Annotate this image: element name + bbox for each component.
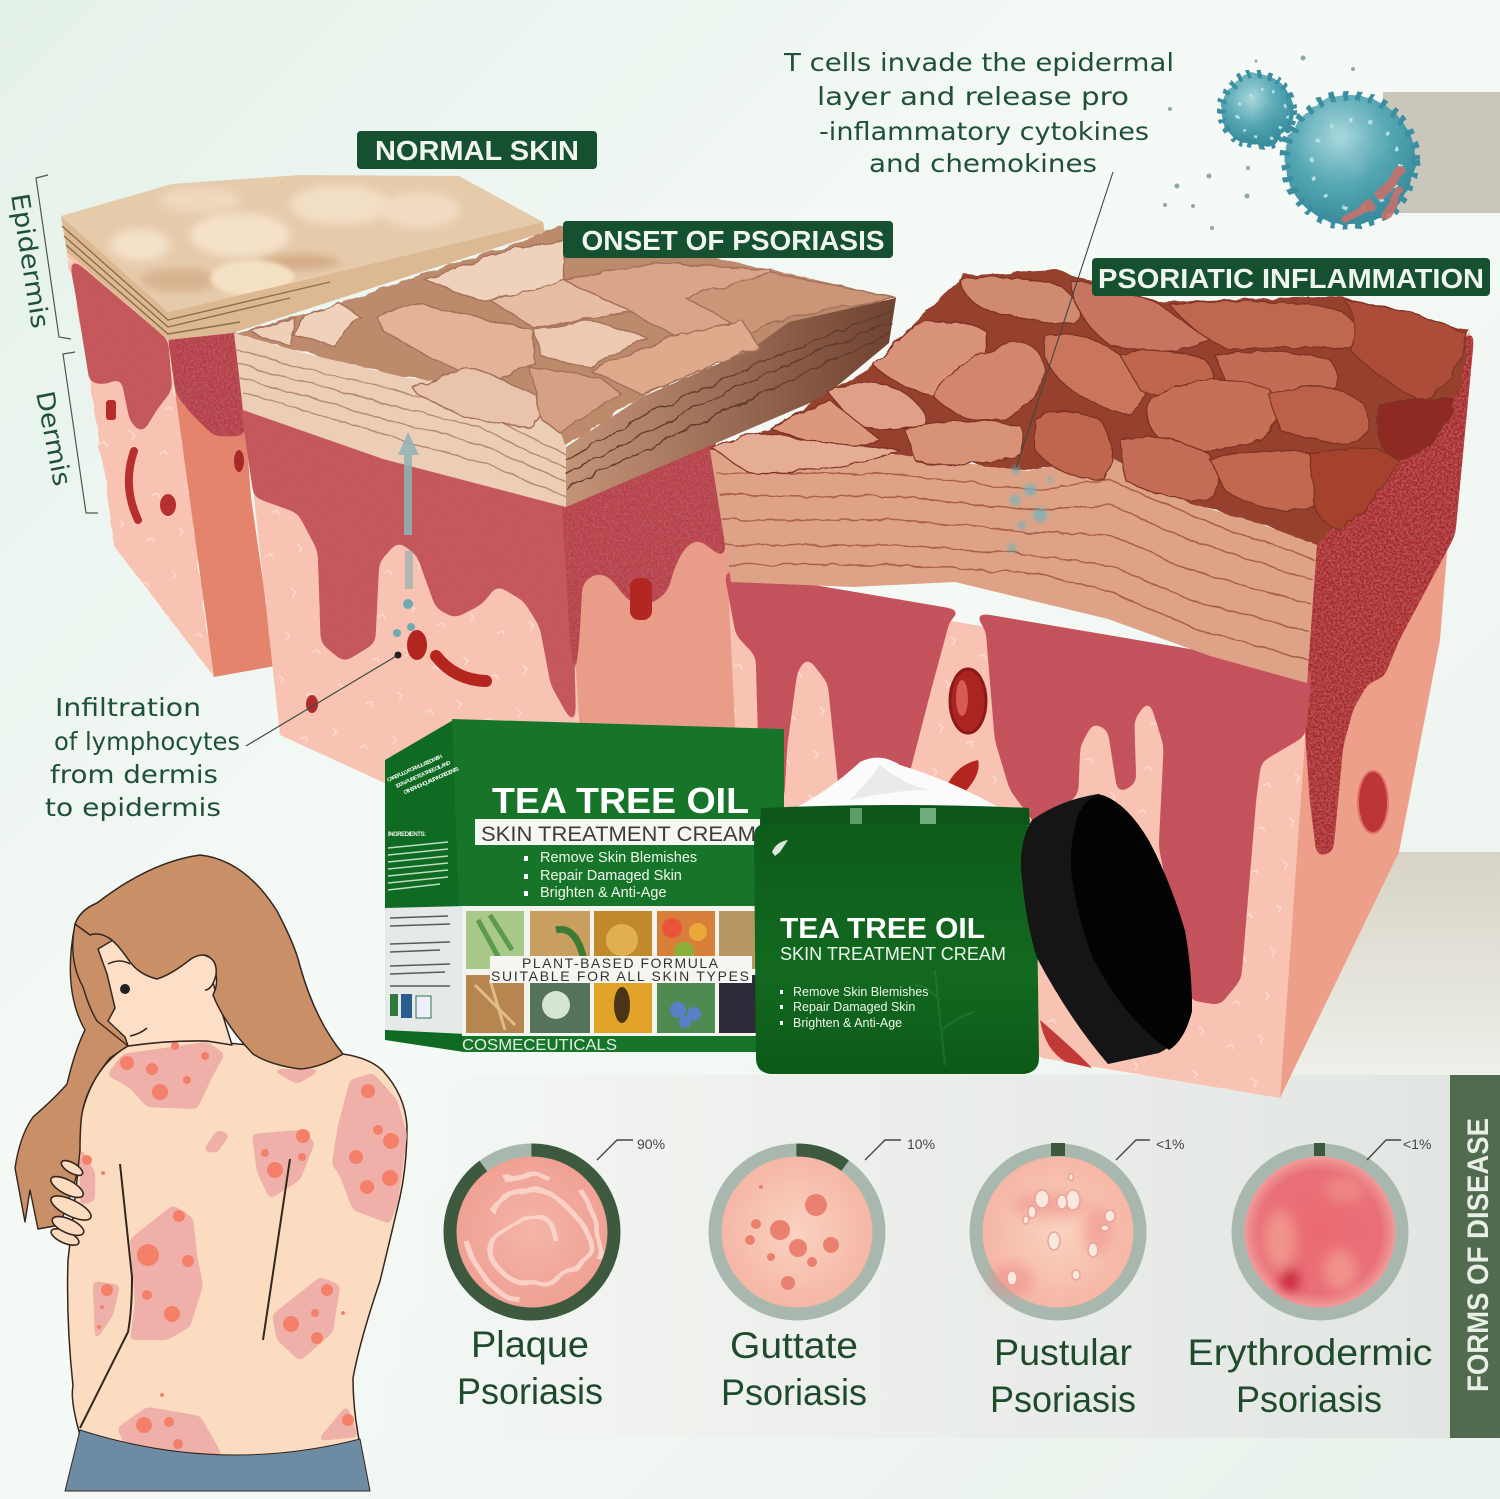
jar subtitle: SKIN TREATMENT CREAM [780, 944, 1006, 964]
label: epidermis bracket [5, 175, 71, 339]
normal skin dermis red band [69, 256, 172, 434]
skin block: normal skin [61, 175, 545, 677]
guttate leader [865, 1140, 901, 1160]
vessel 3 [160, 494, 176, 516]
pustular share mark [1051, 1143, 1065, 1156]
jar highlight [772, 840, 788, 856]
psoriasis spots [82, 1042, 399, 1449]
erythrodermic percent: <1% [1403, 1136, 1431, 1152]
jar bullets: Remove Skin Blemishes [793, 985, 928, 999]
product: jar [754, 758, 1039, 1074]
heading: onset of psoriasis: ONSET OF PSORIASIS [582, 225, 884, 256]
box left ingredients text: INGREDIENTS: [388, 832, 426, 838]
floating particles [1163, 56, 1355, 230]
jar bullets: Repair Damaged Skin [793, 1000, 915, 1014]
eyebrow and mouth [108, 961, 147, 1036]
hair top [75, 855, 343, 1069]
T cells text: T cells invade the epidermal [783, 48, 1174, 77]
heading: psoriatic inflammation: PSORIATIC INFLAMMATION [1098, 263, 1484, 294]
inflamed vessel right [1358, 771, 1388, 833]
back and torso [68, 1041, 407, 1460]
box left ingredient lines [388, 842, 448, 890]
plant-based text: SUITABLE FOR ALL SKIN TYPES [491, 968, 749, 984]
cosmeceuticals: COSMECEUTICALS [462, 1037, 617, 1054]
onset red dermis with fingers [240, 400, 576, 730]
plant-based band [490, 956, 752, 983]
onset vessel right [630, 578, 652, 620]
hair fill beside face [71, 924, 135, 1046]
bottom panel background [380, 1075, 1452, 1438]
disease form: guttate psoriasis [715, 1136, 935, 1413]
neck and face [98, 930, 232, 1046]
pustular label: Psoriasis [990, 1379, 1136, 1420]
jar title: TEA TREE OIL [780, 913, 985, 945]
inflamed layers left [710, 450, 1317, 683]
guttate percent: 10% [907, 1136, 935, 1152]
ear [203, 955, 216, 990]
inflamed left red dermis [724, 570, 1312, 1005]
infiltration text: of lymphocytes [54, 727, 240, 756]
onset left dermis face [245, 411, 582, 790]
jar bullets: Brighten & Anti-Age [793, 1016, 902, 1030]
box bullets: Brighten & Anti-Age [540, 885, 667, 901]
side banner: forms of disease [1450, 1075, 1500, 1438]
plaque label: Plaque [471, 1324, 589, 1365]
inflamed vessel left [950, 669, 986, 733]
box left panel top text: OTHER HIGH-QUALITY INGREDIENTS. [403, 766, 461, 796]
certification badges [390, 994, 431, 1018]
label: dermis bracket [30, 352, 98, 513]
psoriasis patches [80, 1042, 407, 1456]
beige backdrop band behind skin block [1280, 852, 1500, 1077]
pustular leader [1116, 1140, 1150, 1160]
infiltration text: Infiltration [55, 693, 201, 722]
normal skin top face [61, 175, 543, 312]
guttate spots [745, 1185, 839, 1290]
jar body [754, 824, 1039, 1074]
onset migration arrow [398, 432, 419, 535]
T cell large [1285, 95, 1415, 225]
T cells text: layer and release pro [817, 82, 1129, 111]
plaque ring [450, 1150, 614, 1314]
erythrodermic leader [1367, 1140, 1401, 1160]
inflamed fingers lower [1040, 1020, 1092, 1068]
box subtitle: SKIN TREATMENT CREAM [481, 823, 756, 846]
inflamed right face [1280, 331, 1470, 1098]
T cell cluster in epidermis [1008, 466, 1053, 552]
label: epidermis bracket: Epidermis [5, 191, 55, 330]
callout: infiltration of lymphocytes [45, 652, 402, 822]
heading: normal skin [357, 131, 597, 169]
box left description lines [390, 916, 450, 986]
box left panel [385, 719, 464, 1052]
guttate label: Guttate [730, 1325, 858, 1366]
inflamed scale base [710, 270, 1470, 545]
guttate share arc [715, 1150, 879, 1314]
box white image area [462, 906, 762, 1036]
vessel 2 [129, 451, 138, 520]
guttate label: Psoriasis [721, 1372, 867, 1413]
onset vessel [407, 630, 427, 660]
normal skin layers [61, 216, 545, 340]
box left panel top text: 100% PURE TEA TREE OIL AND [395, 760, 452, 790]
eye [120, 984, 130, 994]
box title: TEA TREE OIL [492, 780, 749, 821]
onset right layers [566, 298, 896, 507]
product: tea tree oil box [385, 719, 784, 1054]
cream [795, 758, 1000, 808]
plaque leader [597, 1140, 633, 1160]
inflamed left pink face [728, 582, 1307, 1098]
onset vessel small [306, 695, 318, 713]
skin block: psoriatic inflammation [710, 270, 1475, 1098]
box left panel top text: CAREFULLY FORMULATED WITH [386, 754, 444, 784]
vessel 4 [234, 450, 244, 472]
product: jar lid [1021, 794, 1192, 1064]
box left panel white section [385, 906, 466, 1034]
hand [48, 1158, 94, 1249]
normal skin right face [168, 333, 275, 677]
plaque label: Psoriasis [457, 1371, 603, 1412]
box front [452, 719, 784, 1052]
jar botanical [915, 970, 975, 1065]
side banner: forms of disease: FORMS OF DISEASE [1462, 1118, 1495, 1392]
inflamed vessel inner [956, 680, 968, 716]
icon: T cell viruses [1163, 56, 1415, 230]
box subtitle band [475, 819, 760, 845]
plaque share arc [450, 1150, 614, 1314]
T cell small [1221, 74, 1293, 146]
onset scales [250, 240, 896, 433]
plant-based text: PLANT-BASED FORMULA [522, 955, 719, 971]
inflamed right red dermis [1302, 325, 1475, 857]
box bullets: Remove Skin Blemishes [540, 850, 697, 866]
back lines [80, 1159, 290, 1428]
cream fold [850, 765, 930, 800]
inflamed scales [712, 277, 1468, 530]
illustration: woman with psoriasis [15, 855, 407, 1491]
T cells text: -inflammatory cytokines [819, 117, 1149, 146]
inflamed vessel mid [945, 760, 979, 795]
long hair behind arm [15, 924, 128, 1229]
erythrodermic share mark [1314, 1143, 1325, 1156]
disease form: erythrodermic psoriasis [1188, 1136, 1432, 1420]
heading: normal skin: NORMAL SKIN [375, 135, 579, 166]
pustular redness [990, 1193, 1112, 1296]
T cells leader line [1016, 172, 1113, 468]
jar bullet marks [780, 990, 783, 1025]
plaque percent: 90% [637, 1136, 665, 1152]
ingredient tiles [466, 911, 759, 1033]
jar rim [760, 805, 1030, 825]
erythrodermic label: Erythrodermic [1188, 1332, 1432, 1373]
normal skin dermis left face [67, 252, 214, 677]
callout: T cells [783, 48, 1174, 468]
erythrodermic label: Psoriasis [1236, 1379, 1382, 1420]
infiltration text: from dermis [50, 760, 218, 789]
skin block: onset of psoriasis [234, 226, 896, 790]
infiltration leader line [246, 655, 398, 746]
box bullets: Repair Damaged Skin [540, 868, 682, 884]
disease form: plaque psoriasis [450, 1136, 665, 1412]
pustules [1007, 1174, 1115, 1285]
jar rim highlights [850, 808, 936, 824]
T cells text: and chemokines [869, 149, 1097, 178]
normal skin red finger [168, 328, 245, 436]
erythrodermic ring [1238, 1150, 1402, 1314]
pustular label: Pustular [994, 1332, 1132, 1373]
onset right red finger band [562, 435, 726, 725]
onset vessel curve [436, 656, 486, 681]
vessel 1 [106, 400, 116, 420]
pustular ring [976, 1150, 1140, 1314]
label: dermis bracket: Dermis [30, 389, 77, 488]
guttate ring [715, 1150, 879, 1314]
disease form: pustular psoriasis [976, 1136, 1184, 1420]
erythrodermic texture [1264, 1178, 1365, 1292]
box bullet marks [524, 856, 528, 896]
jeans [65, 1430, 370, 1491]
pustular percent: <1% [1156, 1136, 1184, 1152]
plaque texture [470, 1175, 600, 1300]
onset right face [566, 445, 752, 735]
infiltration text: to epidermis [45, 793, 221, 822]
lymphocyte dots rising [393, 551, 415, 637]
grey backdrop band behind T cell [1383, 92, 1500, 213]
onset left layers [234, 333, 566, 507]
onset top base [234, 226, 896, 447]
